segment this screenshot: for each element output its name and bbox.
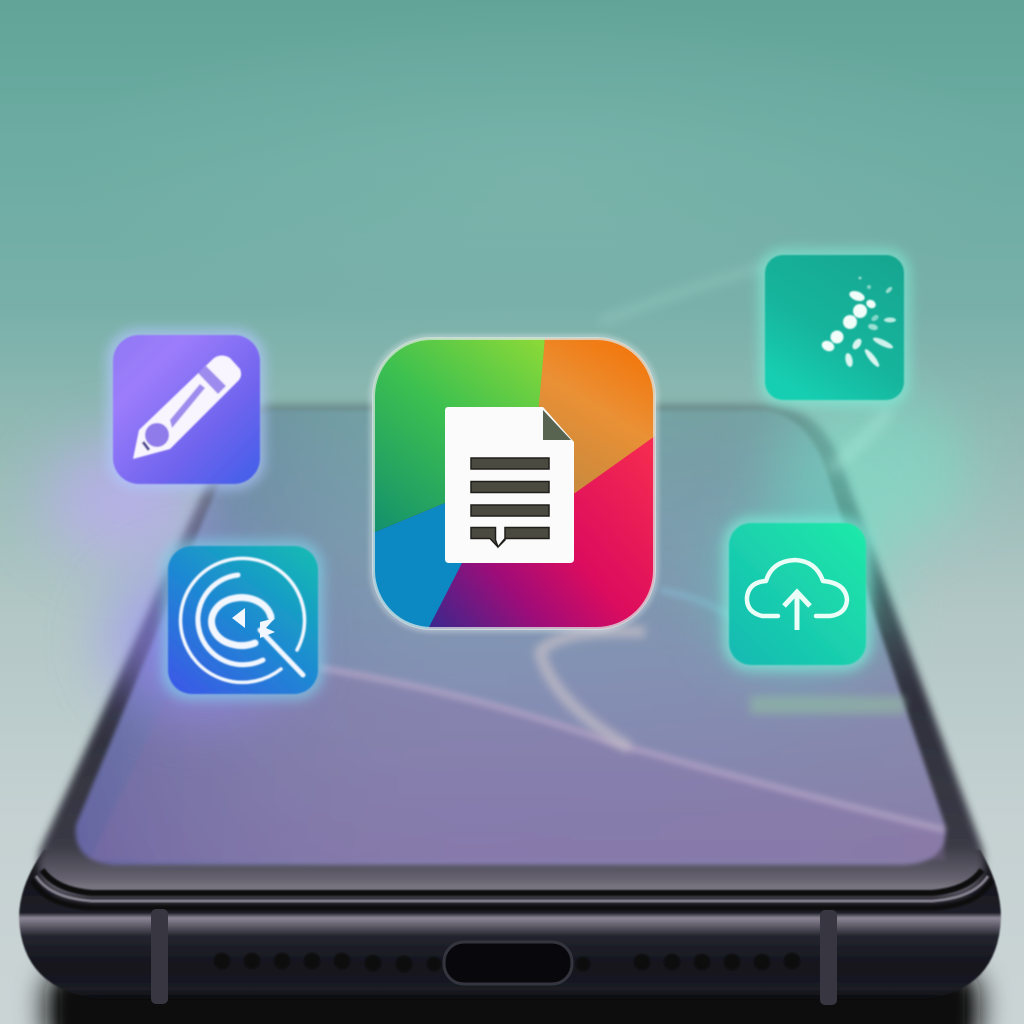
antenna band left [151,909,168,1004]
icon: cloud upload app [723,517,872,671]
glows [45,265,970,715]
antenna band right [820,910,837,1005]
screen swoosh [90,668,945,860]
icon: pencil app [107,329,265,489]
phone body [19,850,1001,999]
document fold [543,410,571,440]
document page [445,407,574,563]
charging port [444,942,572,984]
bezel edge lines [32,870,992,908]
icon: circular target app [162,540,324,700]
red and violet segment [373,338,655,629]
phone bezel [38,404,984,895]
speaker holes left [214,953,441,972]
phone ground shadow [45,970,980,1024]
green segment [373,338,545,533]
orange segment [530,338,655,493]
phone screen [76,410,946,865]
icon: central document app [369,334,659,633]
phone [19,404,1001,1024]
speaker holes right [576,953,800,971]
document lines [471,458,549,547]
blue segment [373,503,462,629]
icon: teal dots app [759,249,910,406]
